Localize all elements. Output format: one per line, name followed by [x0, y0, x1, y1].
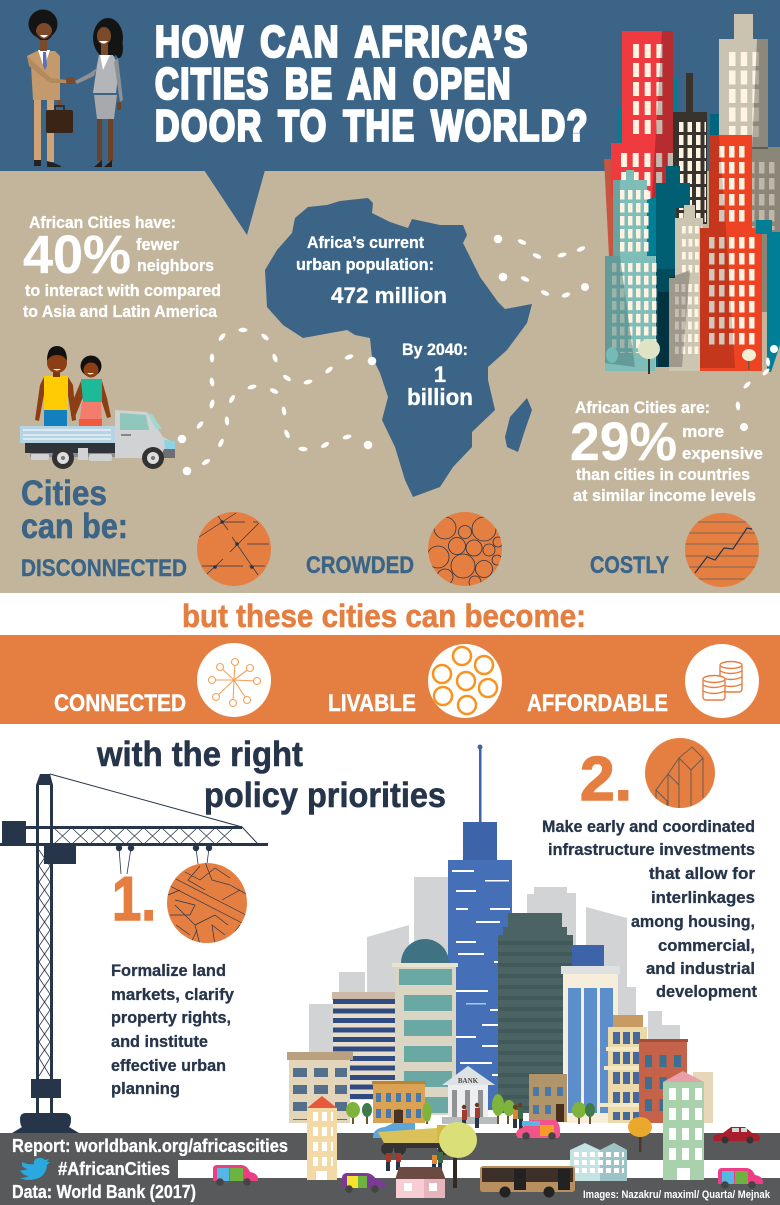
label: costly: COSTLY: [590, 552, 669, 579]
priority 1 text: [111, 961, 235, 1098]
priority 2 text: commercial,: [658, 936, 755, 955]
crane base: [12, 1113, 79, 1133]
illustration: grey background skyline: [309, 877, 680, 1052]
woman on truck: [71, 356, 111, 426]
pink house: [395, 1167, 446, 1198]
title: DOOR TO THE WORLD?: [155, 102, 589, 150]
priority 2 text: interlinkages: [651, 888, 755, 907]
icon: affordable coin stacks: [685, 644, 759, 718]
teal fragments behind: [617, 77, 719, 256]
left tan building: [287, 1052, 353, 1123]
stat: 40% fewer neighbors: African Cities have:: [29, 213, 176, 232]
truck: [20, 410, 175, 469]
hooks: [116, 845, 212, 874]
priority 2 text: among housing,: [631, 912, 755, 931]
bank: [442, 1066, 497, 1124]
icon: rising buildings: [645, 738, 715, 810]
small blue block: [572, 945, 604, 967]
heading: with the right policy priorities: [96, 735, 446, 815]
stat: 40% fewer neighbors: [23, 213, 221, 321]
label: connected: CONNECTED: [54, 690, 186, 717]
icon: twitter bird: [20, 1158, 50, 1180]
label: affordable: AFFORDABLE: [527, 690, 668, 717]
tan middle background: [0, 171, 780, 593]
yellow-green tree: [439, 1122, 477, 1188]
tan stacked building: [600, 1015, 648, 1123]
navy striped building: [332, 992, 404, 1100]
heading: but these cities can become: but these cities can become:: [182, 598, 586, 634]
back beige tower: [719, 14, 780, 312]
crane mast: [36, 785, 53, 1115]
white and blue tower: [561, 966, 620, 1123]
dotted migration paths: [178, 235, 778, 475]
priority 2 text: Make early and coordinated: [542, 817, 755, 836]
map labels: urban population: urban population:: [296, 255, 434, 274]
illustration: street foreground: [213, 1071, 763, 1198]
blue skyscraper: [448, 744, 512, 1110]
red car: [713, 1127, 760, 1144]
illustration: business people shaking hands: [27, 10, 123, 167]
map labels: urban population: [296, 233, 473, 410]
map labels: urban population: 472 million: [331, 283, 447, 308]
map of Africa: [265, 198, 532, 497]
speech bubble pointer: [204, 170, 265, 235]
counterweight: [2, 821, 26, 845]
pale beige tower: [669, 205, 703, 371]
dump truck: [378, 1125, 461, 1155]
title: [155, 18, 589, 150]
people crossing street: [386, 1152, 443, 1172]
trees: [606, 339, 756, 374]
label: disconnected: DISCONNECTED: [21, 555, 187, 582]
priority 1 text: property rights,: [111, 1008, 231, 1027]
bank: BANK: [458, 1077, 479, 1085]
map labels: urban population: By 2040:: [402, 340, 468, 359]
orange band: positive outcomes: [0, 635, 780, 724]
footer text: data source: Data: World Bank (2017): [12, 1182, 196, 1202]
stat: 40% fewer neighbors: fewer: [136, 235, 179, 254]
heading: cities can be: Cities: [21, 474, 107, 513]
footer text: hashtag: #AfricanCities: [58, 1159, 170, 1179]
priority 2 text: that allow for: [649, 864, 755, 883]
icon: cracked land: [167, 862, 248, 945]
icon: livable rings: [428, 644, 502, 718]
label: crowded: CROWDED: [306, 552, 414, 579]
priority 1 text: and institute: [111, 1032, 208, 1051]
road and footer band: [0, 1133, 780, 1205]
map labels: urban population: Africa’s current: [307, 233, 424, 252]
stat: 29% more expensive: more: [682, 422, 724, 441]
stat: 40% fewer neighbors: to Asia and Latin America: [23, 302, 218, 321]
woman: [75, 18, 123, 167]
priority 2 text: [542, 817, 757, 1001]
blue car behind truck: [373, 1123, 415, 1138]
priority 1 text: Formalize land: [111, 961, 226, 980]
illustration: colorful skyline, top right: [604, 14, 780, 374]
bus: [480, 1166, 575, 1198]
priority 1 number: 1.: [112, 865, 156, 934]
stat: 29% more expensive: than cities in countries: [576, 465, 750, 484]
red brick building: [638, 1039, 688, 1123]
title: CITIES BE AN OPEN: [155, 60, 512, 108]
purple car: [342, 1173, 386, 1193]
stat: 40% fewer neighbors: to interact with compared: [25, 281, 221, 300]
stat: 29% more expensive: [570, 398, 763, 505]
priority 1 text: planning: [111, 1079, 180, 1098]
dark green tower: [498, 913, 573, 1113]
light blue houses: [570, 1143, 627, 1181]
title: HOW CAN AFRICA’S: [155, 18, 529, 66]
priority 2 number: 2.: [580, 745, 632, 814]
priority 2 text: and industrial: [646, 959, 755, 978]
stat: 40% fewer neighbors: 40%: [23, 225, 131, 285]
top blue header background: [0, 0, 780, 172]
illustration: crane: [0, 774, 268, 1133]
priority 1 text: effective urban: [111, 1056, 226, 1075]
orange building: [372, 1081, 426, 1123]
dark teal cross tower: [656, 166, 690, 367]
map labels: urban population: billion: [407, 384, 473, 410]
Madagascar: [505, 398, 532, 452]
priority 2 text: infrastructure investments: [548, 840, 755, 859]
illustration: couple on a truck: [20, 346, 175, 469]
stat: 29% more expensive: expensive: [682, 444, 763, 463]
colorful van on road: [516, 1120, 560, 1140]
label: livable: LIVABLE: [328, 690, 416, 717]
brown small building: [529, 1074, 567, 1122]
stat: 40% fewer neighbors: neighbors: [137, 256, 214, 275]
icon: connected hub: [197, 643, 271, 717]
back tan block right: [693, 1072, 713, 1123]
icon: crowded circles: [427, 512, 503, 588]
crane cabin: [44, 845, 76, 864]
man on truck: [35, 346, 76, 427]
map labels: urban population: 1: [434, 362, 446, 387]
priority 2 text: development: [656, 982, 757, 1001]
pink van right: [718, 1168, 763, 1189]
pink van left: [213, 1165, 258, 1186]
trees row: [346, 1094, 595, 1124]
priority 1 text: markets, clarify: [111, 985, 235, 1004]
heading: cities can be: can be:: [21, 507, 128, 546]
pale teal tower: [605, 170, 660, 371]
small orange roof tower: [307, 1096, 337, 1180]
stat: 29% more expensive: at similar income levels: [573, 486, 756, 505]
red tower: [604, 31, 685, 256]
green apartment building: [663, 1071, 704, 1180]
crane boom: [0, 774, 268, 846]
icon: disconnected network: [197, 512, 271, 586]
bright teal right tower: [756, 220, 780, 372]
heading: cities can be: [21, 474, 128, 546]
yellow tree: [628, 1117, 652, 1152]
orange-red tower: [700, 135, 762, 371]
icon: rising cost chart: [685, 513, 759, 587]
people on the sidewalk: [462, 1103, 523, 1129]
heading: with the right policy priorities: with the right: [96, 735, 303, 774]
heading: with the right policy priorities: policy priorities: [204, 776, 446, 815]
stat: 29% more expensive: 29%: [570, 412, 677, 472]
footer text: report link: Report: worldbank.org/africascities: [12, 1136, 288, 1156]
illustration: modern city: [287, 744, 713, 1129]
domed glass building: [392, 939, 458, 1115]
stat: 29% more expensive: African Cities are:: [575, 398, 710, 417]
man: [27, 10, 75, 167]
dark tower: [673, 73, 707, 224]
